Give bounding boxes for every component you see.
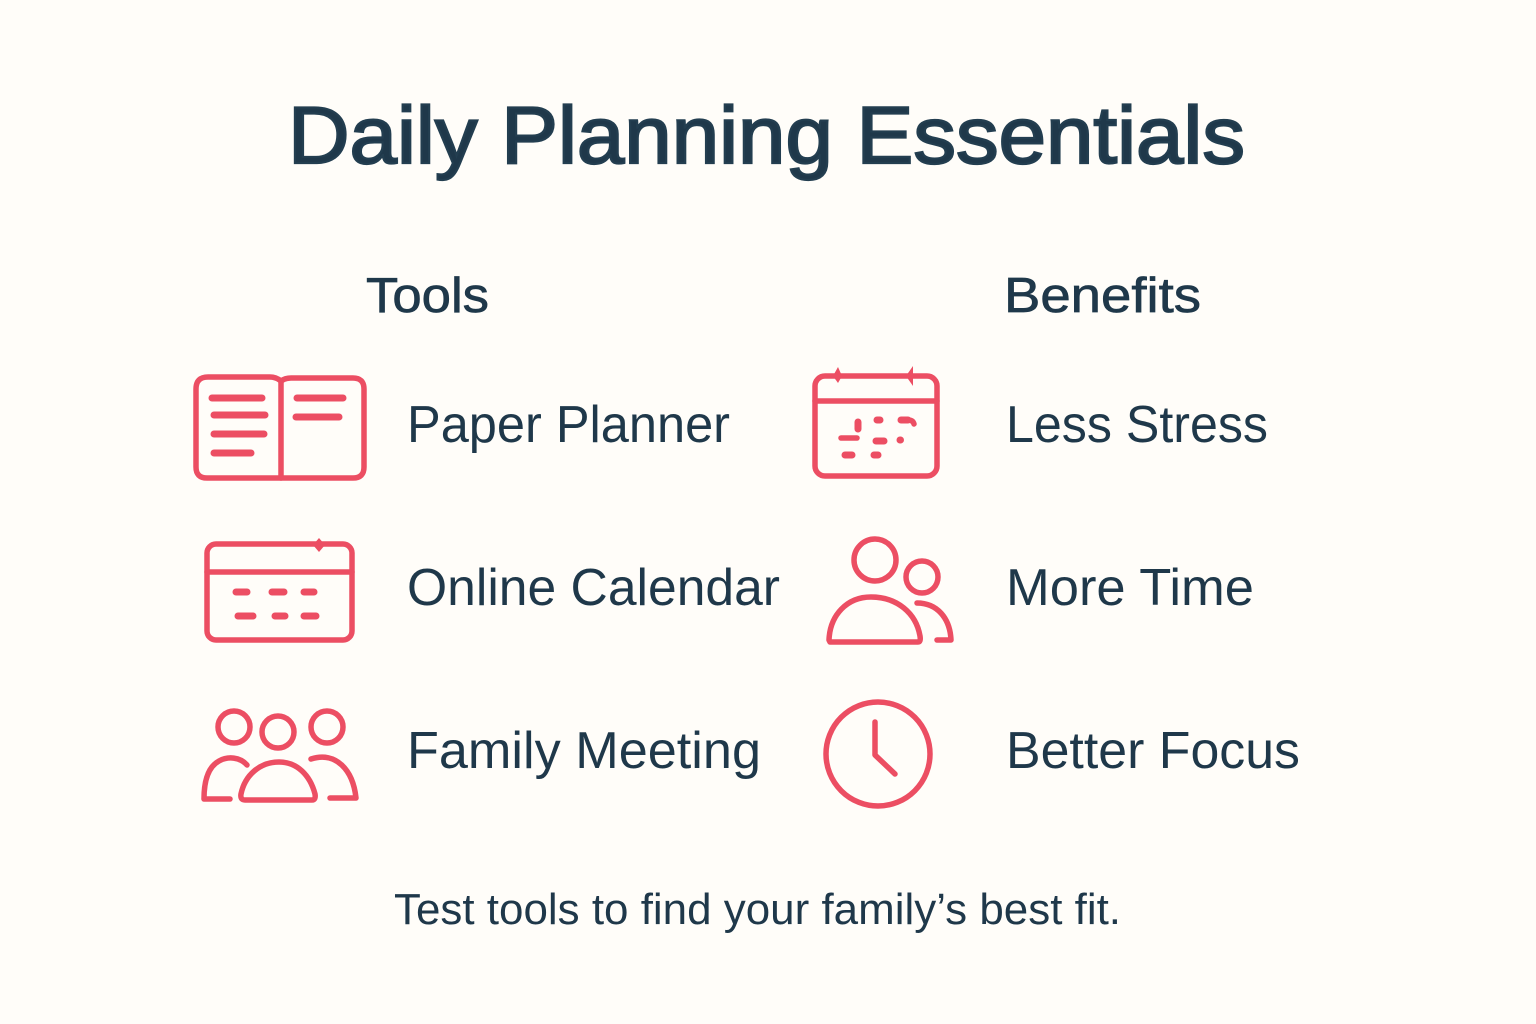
- icon: calendar with dots: [815, 366, 937, 476]
- icon: online calendar: [207, 538, 352, 640]
- label: family meeting: Family Meeting: [407, 722, 761, 780]
- icon: clock: [826, 702, 930, 806]
- panel: benefits: [815, 269, 1300, 806]
- footer note: Test tools to find your family’s best fit.: [394, 885, 1121, 934]
- heading: benefits: Benefits: [1004, 269, 1201, 323]
- title: Daily Planning Essentials: [288, 91, 1245, 181]
- label: better focus: Better Focus: [1006, 722, 1300, 780]
- label: more time: More Time: [1006, 559, 1254, 617]
- label: online calendar: Online Calendar: [407, 559, 780, 617]
- heading: tools: Tools: [366, 269, 489, 323]
- icon: open paper planner: [196, 377, 364, 478]
- panel: tools: [196, 269, 780, 800]
- icon: family meeting: [204, 711, 356, 800]
- label: paper planner: Paper Planner: [407, 396, 730, 454]
- label: less stress: Less Stress: [1006, 396, 1268, 454]
- icon: two people: [829, 539, 951, 642]
